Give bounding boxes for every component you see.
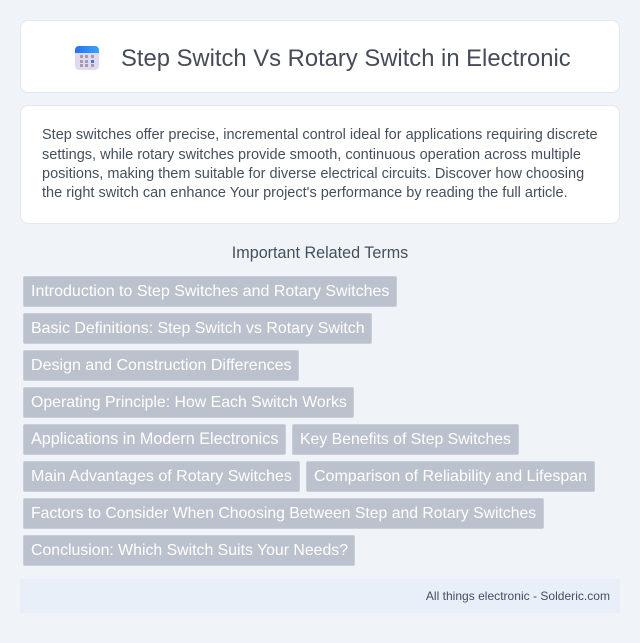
icon: calendar grid: [75, 46, 99, 70]
related terms tags: Introduction to Step Switches and Rotary Switches: [31, 283, 389, 300]
section heading: Important Related Terms: [232, 244, 408, 262]
header card: [20, 20, 620, 93]
related terms tags: Operating Principle: How Each Switch Works: [31, 394, 347, 411]
title: Step Switch Vs Rotary Switch in Electronic: [121, 45, 571, 72]
footer bar: [20, 579, 620, 613]
summary text: [42, 127, 598, 201]
summary text: the right switch can enhance Your project's performance by reading the full article.: [42, 185, 568, 201]
summary text: settings, while rotary switches provide smooth, continuous operation across multiple: [42, 147, 581, 163]
related terms tags: Conclusion: Which Switch Suits Your Needs?: [31, 542, 348, 559]
summary card: [20, 105, 620, 224]
related terms tags: Comparison of Reliability and Lifespan: [314, 468, 587, 485]
footer credit: All things electronic - Solderic.com: [426, 589, 610, 603]
related terms tags: Basic Definitions: Step Switch vs Rotary Switch: [31, 320, 365, 337]
related terms tags: [23, 276, 595, 566]
summary text: Step switches offer precise, incremental control ideal for applications requiring discrete: [42, 127, 598, 143]
summary text: positions, making them suitable for diverse electrical circuits. Discover how choosing: [42, 166, 584, 182]
related terms tags: Applications in Modern Electronics: [31, 430, 278, 448]
related terms tags: Design and Construction Differences: [31, 356, 292, 374]
related terms tags: Key Benefits of Step Switches: [300, 431, 511, 448]
related terms tags: Main Advantages of Rotary Switches: [31, 467, 292, 485]
related terms tags: Factors to Consider When Choosing Between Step and Rotary Switches: [31, 505, 536, 522]
